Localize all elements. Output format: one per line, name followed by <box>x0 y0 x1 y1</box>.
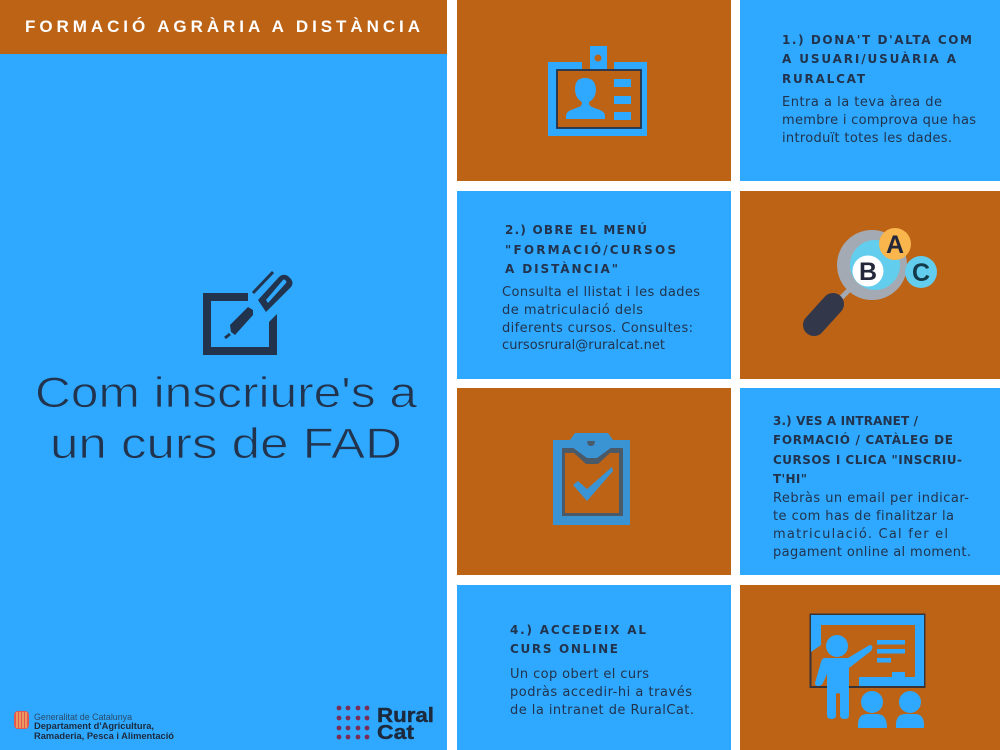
panel: step 1 text: RURALCAT <box>782 72 866 86</box>
panel: step 2 text: 2.) OBRE EL MENÚ <box>505 222 647 237</box>
panel: step 3 text: matriculació. Cal fer el <box>773 527 948 542</box>
panel: step 1 text <box>740 0 1000 181</box>
title <box>35 369 417 468</box>
title: Com inscriure's a <box>35 369 417 417</box>
logo: Generalitat de Catalunya: Generalitat de Catalunya <box>34 712 133 723</box>
logo: RuralCat: Cat <box>377 722 414 744</box>
logo: RuralCat <box>337 705 434 744</box>
icon: magnifier with letters: B <box>859 258 877 286</box>
panel: step 3 text: FORMACIÓ / CATÀLEG DE <box>773 432 953 447</box>
icon: pen and square <box>203 272 292 355</box>
panel: step 1 text: Entra a la teva àrea de <box>782 95 942 110</box>
panel: step 2 text: Consulta el llistat i les dades <box>502 285 700 300</box>
header band: FORMACIÓ AGRÀRIA A DISTÀNCIA <box>25 17 420 36</box>
panel: step 1 text: 1.) DONA'T D'ALTA COM <box>782 33 972 47</box>
panel: step 4 text: Un cop obert el curs <box>510 667 649 682</box>
panel: step 1 text: introduït totes les dades. <box>782 131 952 146</box>
panel: step 1 text: A USUARI/USUÀRIA A <box>782 51 957 66</box>
panel: step 4 text: 4.) ACCEDEIX AL <box>510 623 646 637</box>
panel: step 2 icon <box>740 191 1000 379</box>
icon: magnifier with letters: A <box>886 231 904 259</box>
panel: step 3 text: CURSOS I CLICA "INSCRIU- <box>773 453 962 467</box>
icon: magnifier with letters: C <box>912 259 930 287</box>
panel: step 3 text: 3.) VES A INTRANET / <box>773 414 919 428</box>
icon: ID badge <box>548 46 647 136</box>
panel: step 4 text: CURS ONLINE <box>510 642 618 656</box>
header band <box>0 0 447 54</box>
panel: step 3 text: Rebràs un email per indicar- <box>773 491 969 506</box>
panel: step 3 icon <box>457 388 731 575</box>
logo: Generalitat de Catalunya <box>14 711 175 741</box>
panel: step 2 text: de matriculació dels <box>502 303 643 318</box>
panel: step 3 text: T'HI" <box>773 472 807 486</box>
panel: step 4 text: podràs accedir-hi a través <box>510 685 692 700</box>
panel: step 1 text: membre i comprova que has <box>782 113 976 128</box>
panel: step 3 text: te com has de finalitzar la <box>773 509 954 524</box>
logo: Generalitat de Catalunya: Ramaderia, Pesca i Alimentació <box>34 731 175 741</box>
panel: step 3 text: pagament online al moment. <box>773 545 971 560</box>
panel: left cover <box>0 0 447 750</box>
panel: step 2 text: diferents cursos. Consultes: <box>502 321 693 336</box>
panel: step 4 text: de la intranet de RuralCat. <box>510 703 694 718</box>
panel: step 2 text <box>457 191 731 379</box>
panel: step 1 icon <box>457 0 731 181</box>
logo: Generalitat de Catalunya: Departament d'Agricultura, <box>34 721 154 731</box>
panel: step 4 text <box>457 585 731 750</box>
panel: step 2 text: cursosrural@ruralcat.net <box>502 338 665 353</box>
logo: RuralCat: Rural <box>377 705 434 727</box>
icon: teacher at board with students <box>810 614 924 728</box>
panel: step 4 icon <box>740 585 1000 750</box>
icon: magnifier with letters <box>814 228 937 325</box>
icon: clipboard with check <box>553 433 630 525</box>
title: un curs de FAD <box>50 420 402 468</box>
panel: step 2 text: "FORMACIÓ/CURSOS <box>505 242 676 257</box>
panel: step 2 text: A DISTÀNCIA" <box>505 261 618 276</box>
panel: step 3 text <box>740 388 1000 575</box>
